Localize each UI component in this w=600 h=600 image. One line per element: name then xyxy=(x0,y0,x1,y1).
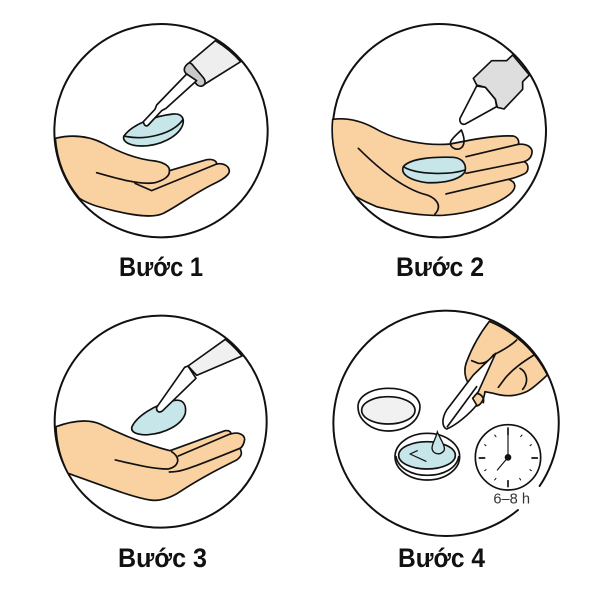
heading: step 3: Bước 3 xyxy=(118,543,207,573)
heading: step 4: Bước 4 xyxy=(398,543,485,573)
contact lens xyxy=(124,114,183,146)
heading: step 1: Bước 1 xyxy=(119,252,203,282)
hand with lens in palm xyxy=(332,119,532,215)
hand xyxy=(56,421,245,500)
clock xyxy=(475,425,541,490)
heading: step 2: Bước 2 xyxy=(396,252,484,282)
circle frame xyxy=(55,316,267,528)
dropper applicator xyxy=(143,41,241,126)
drop xyxy=(432,432,444,454)
contact lens xyxy=(132,400,186,435)
panel: step 3 xyxy=(55,316,267,528)
clock duration label: 6–8 h xyxy=(493,491,530,507)
hand holding lens xyxy=(55,136,229,216)
tweezers xyxy=(443,353,496,429)
panel: step 2 xyxy=(332,24,546,237)
circle frame xyxy=(54,24,268,237)
tweezers applicator xyxy=(157,339,242,412)
circle frame xyxy=(333,311,559,536)
fingers holding tweezers xyxy=(465,321,547,406)
circle frame xyxy=(333,24,546,237)
open lens case lid xyxy=(358,388,420,431)
contact lens xyxy=(403,157,465,183)
solution bottle xyxy=(460,55,529,124)
solution drop xyxy=(450,130,464,149)
panel: step 4 xyxy=(333,311,559,536)
panel: step 1 xyxy=(54,24,268,237)
lens case with solution xyxy=(395,433,460,480)
